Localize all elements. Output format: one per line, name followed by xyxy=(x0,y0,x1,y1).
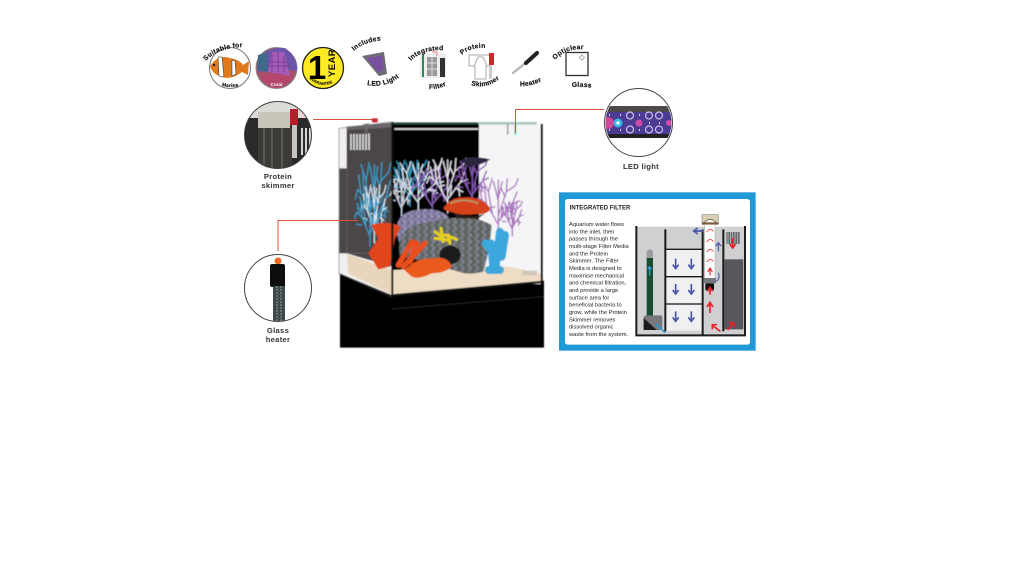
callout: glass heater xyxy=(244,220,358,344)
green intake tube xyxy=(644,249,665,333)
skimmer column xyxy=(702,215,718,290)
sand floor xyxy=(393,267,541,295)
panel description text xyxy=(568,222,630,338)
icon: opticlear glass xyxy=(552,45,592,88)
panel description text: dissolved organic xyxy=(569,325,614,331)
icon: includes LED light: Includes xyxy=(351,36,380,51)
filter diagram xyxy=(636,215,745,335)
icon: suitable for marine clownfish: Marine xyxy=(222,82,238,88)
return chamber with sponge xyxy=(724,232,743,329)
white and blue fan corals xyxy=(390,158,468,217)
panel description text: waste from the system. xyxy=(568,332,629,338)
icon: protein skimmer: Protein xyxy=(459,42,485,55)
icon: one year guarantee: YEAR xyxy=(327,49,338,77)
panel: integrated filter xyxy=(559,192,756,351)
callout: protein skimmer: Protein xyxy=(264,172,292,181)
right back white wall xyxy=(478,124,541,284)
diagram walls xyxy=(636,226,745,335)
top red coral xyxy=(443,197,490,215)
icon: integrated filter: Filter xyxy=(429,82,446,90)
yellow coral xyxy=(435,228,457,243)
panel description text: grow, while the Protein xyxy=(569,310,627,316)
callout: glass heater: heater xyxy=(266,335,290,344)
icon: includes LED light xyxy=(351,36,400,86)
blue flow arrows xyxy=(673,228,721,321)
icon: includes LED light: LED Light xyxy=(367,74,400,86)
icon: one year guarantee: GUARANTEE xyxy=(310,76,332,86)
left red coral xyxy=(368,223,401,269)
icon: suitable for marine clownfish xyxy=(203,42,251,89)
icon: integrated filter xyxy=(408,45,446,90)
panel description text: multi-stage Filter Media xyxy=(569,244,630,250)
callout: glass heater: Glass xyxy=(267,326,289,335)
panel description text: and chemical filtration, xyxy=(569,281,627,287)
blue fan coral xyxy=(355,162,393,247)
orange finger coral xyxy=(398,242,425,267)
purple fan corals xyxy=(455,160,523,237)
icon: coral xyxy=(256,48,297,88)
panel description text: Skimmer removes xyxy=(569,317,615,323)
back black wall xyxy=(392,124,479,271)
icon: integrated filter: Integrated xyxy=(408,45,443,61)
icon: one year guarantee xyxy=(302,46,344,90)
icon: suitable for marine clownfish: Suitable for xyxy=(203,42,242,60)
icon: heater xyxy=(512,50,541,86)
red flow arrows xyxy=(707,238,736,331)
callout: protein skimmer xyxy=(244,101,372,190)
icon row: feature badges xyxy=(203,36,592,90)
rock pile xyxy=(397,209,448,250)
panel description text: Media is designed to xyxy=(569,266,622,272)
panel heading: INTEGRATED FILTER xyxy=(570,206,631,212)
panel description text: and the Protein xyxy=(569,251,608,257)
icon: one year guarantee: 1 xyxy=(308,49,326,86)
panel description text: Aquarium water flows xyxy=(569,222,624,228)
filter media chambers xyxy=(665,249,703,331)
icon: opticlear glass: Glass xyxy=(572,82,592,88)
panel description text: passes through the xyxy=(569,237,618,243)
panel description text: Skimmer. The Filter xyxy=(569,259,619,265)
callout: protein skimmer: skimmer xyxy=(261,181,295,190)
panel description text: and provide a large xyxy=(569,288,618,294)
panel description text: beneficial bacteria to xyxy=(569,303,622,309)
panel description text: maximise mechanical xyxy=(569,273,624,279)
panel description text: surface area for xyxy=(569,295,609,301)
icon: protein skimmer xyxy=(459,42,499,87)
blue coral xyxy=(486,232,505,270)
callout: LED light xyxy=(516,88,674,171)
icon: opticlear glass: Opticlear xyxy=(552,45,584,59)
icon: coral: Coral xyxy=(271,82,282,87)
icon: protein skimmer: Skimmer xyxy=(471,76,499,87)
callout: LED light: LED light xyxy=(623,162,659,171)
panel description text: into the inlet, then xyxy=(569,229,614,235)
cabinet stand xyxy=(340,273,544,348)
left side glass and dark panel xyxy=(339,123,392,295)
orange brain coral xyxy=(404,258,452,278)
icon: heater: Heater xyxy=(520,78,541,86)
aquarium tank on cabinet xyxy=(339,118,544,348)
glass frame xyxy=(392,122,542,297)
fish silhouette xyxy=(461,157,490,167)
